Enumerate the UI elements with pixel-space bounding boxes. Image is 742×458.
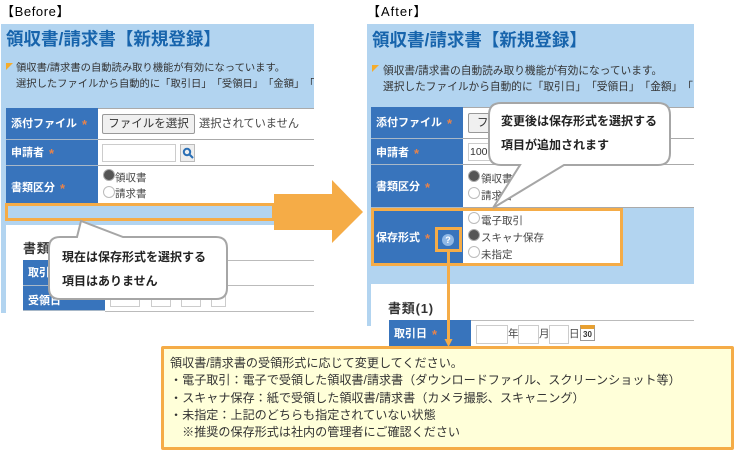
row: attachment: 選択されていません	[199, 118, 299, 130]
notice text	[16, 62, 314, 90]
row: document type: 領収書	[481, 173, 512, 185]
callout text: 現在は保存形式を選択する	[62, 250, 206, 264]
page title: 領収書/請求書【新規登録】	[372, 30, 587, 50]
callout: after	[488, 102, 671, 209]
row: document type: 書類区分 *	[11, 181, 65, 196]
file button: ファイルを選択	[108, 118, 189, 130]
notice text: 選択したファイルから自動的に「取引日」「受領日」「金額」「	[16, 79, 314, 90]
row: applicant	[371, 139, 694, 165]
callout text	[501, 114, 657, 152]
tooltip: storage format explanation: ・電子取引：電子で受領した領収書/請求書（ダウンロードファイル、スクリーンショット等）	[170, 373, 681, 387]
callout text	[62, 250, 206, 288]
row: attachment	[6, 108, 314, 140]
row: document type	[371, 165, 694, 208]
notice text: 選択したファイルから自動的に「取引日」「受領日」「金額」「	[383, 81, 693, 93]
calendar icon: 30	[583, 330, 592, 339]
row: document type: 書類区分 *	[376, 180, 430, 195]
highlight: help icon	[435, 227, 462, 252]
date row	[389, 320, 694, 346]
callout: before	[48, 220, 228, 300]
row: attachment	[371, 107, 694, 139]
row: document type	[6, 166, 314, 203]
panel: after screen	[367, 24, 694, 346]
row: document type: 領収書	[115, 172, 146, 184]
row: storage format: 電子取引	[481, 215, 523, 227]
search icon	[180, 144, 195, 162]
date row: 年	[508, 328, 518, 340]
document section heading: 書類(1)	[388, 301, 434, 316]
help icon	[442, 234, 454, 246]
document table	[23, 260, 314, 312]
tooltip: storage format explanation	[161, 346, 734, 450]
notice icon	[372, 65, 379, 72]
highlight: missing row	[5, 203, 275, 221]
callout text: 変更後は保存形式を選択する	[501, 114, 657, 128]
row: storage format	[374, 211, 620, 263]
document table: 受領日	[28, 295, 61, 307]
notice icon	[6, 63, 13, 70]
row: storage format: 保存形式 *	[376, 231, 430, 246]
callout text: 項目が追加されます	[501, 138, 609, 152]
row: document type: 請求書	[115, 188, 146, 200]
page title: 領収書/請求書【新規登録】	[6, 29, 221, 49]
row: attachment: 添付ファイル *	[376, 116, 452, 131]
date row: 日	[569, 328, 580, 340]
document section heading: 書類	[23, 241, 51, 256]
row: document type: 請求書	[481, 190, 512, 202]
row: attachment: フ	[477, 117, 488, 129]
row: applicant	[6, 140, 314, 166]
heading: After: 【After】	[367, 4, 427, 19]
document table: 取引日	[28, 267, 61, 279]
tooltip: storage format explanation: ・未指定：上記のどちらも指定されていない状態	[170, 408, 436, 422]
notice text	[383, 64, 693, 93]
help icon: ?	[445, 235, 451, 245]
callout text: 項目はありません	[62, 274, 158, 288]
row: applicant: 100	[470, 146, 488, 158]
date row: 月	[539, 328, 550, 340]
row: applicant: 申請者 *	[11, 146, 54, 161]
row: storage format: スキャナ保存	[481, 232, 544, 244]
tooltip: storage format explanation: ・スキャナ保存：紙で受領した領収書/請求書（カメラ撮影、スキャニング）	[170, 391, 585, 405]
highlight: storage format row	[371, 208, 623, 266]
tooltip: storage format explanation: 領収書/請求書の受領形式に応じて変更してください。	[170, 356, 463, 370]
calendar icon	[580, 325, 595, 341]
date row: 取引日 *	[394, 327, 437, 342]
notice text: 領収書/請求書の自動読み取り機能が有効になっています。	[16, 63, 285, 74]
row: storage format: 未指定	[481, 249, 512, 261]
tooltip: storage format explanation: ※推奨の保存形式は社内の管理者にご確認ください	[182, 425, 460, 439]
row: attachment: 添付ファイル *	[11, 117, 87, 132]
notice text: 領収書/請求書の自動読み取り機能が有効になっています。	[383, 65, 662, 77]
heading: Before: 【Before】	[1, 4, 70, 19]
row: applicant: 申請者 *	[376, 146, 419, 161]
arrow: help to tooltip	[444, 252, 452, 346]
file button	[102, 114, 195, 134]
panel: before screen	[1, 24, 314, 313]
arrow: before to after	[274, 180, 363, 243]
